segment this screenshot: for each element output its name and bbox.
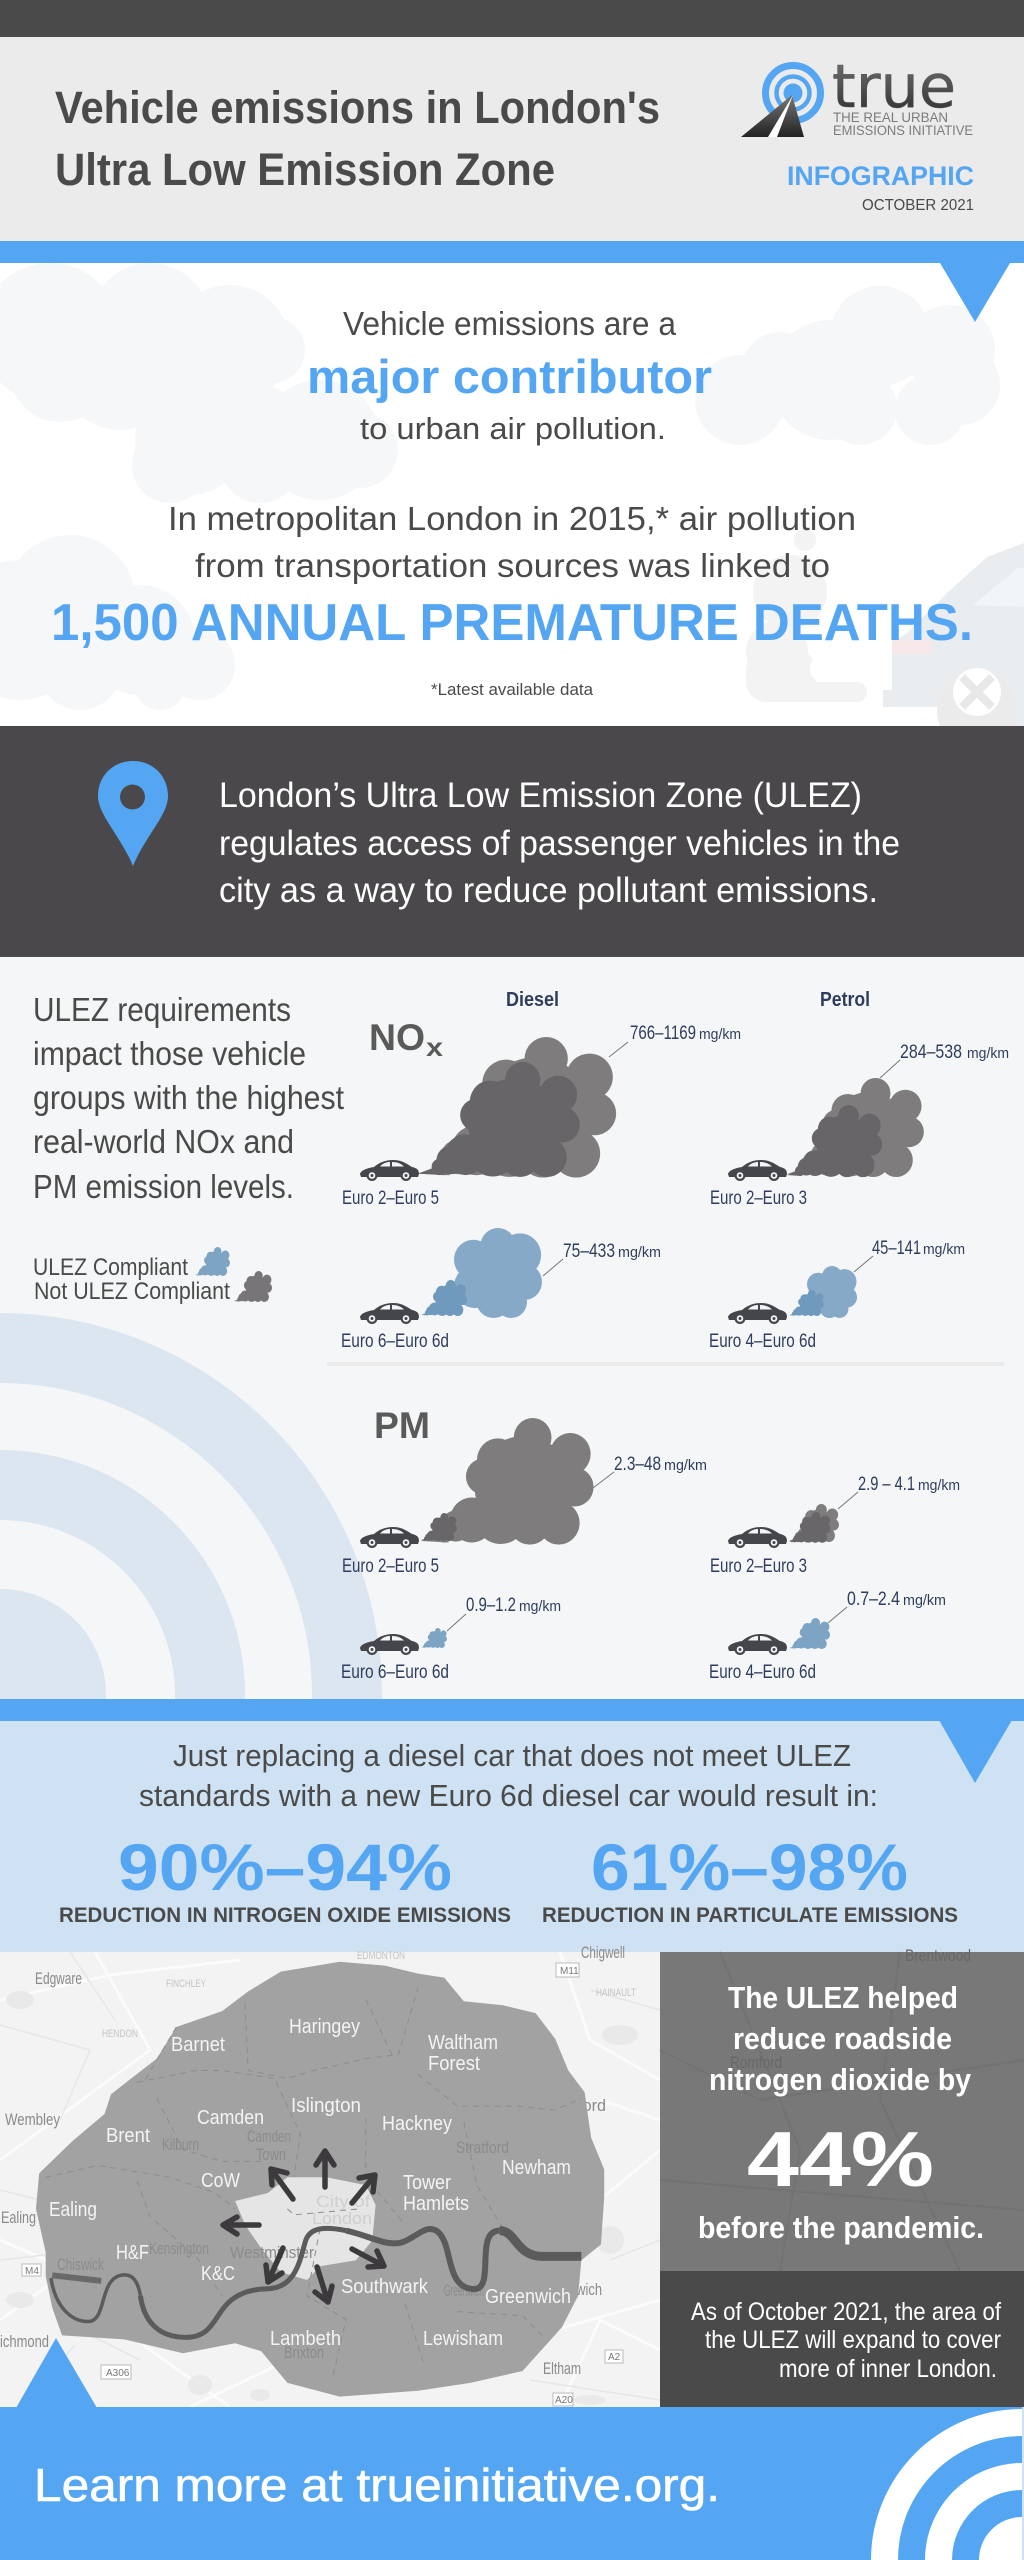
road markers: M4 bbox=[25, 2266, 39, 2277]
borough labels bbox=[49, 2016, 571, 2350]
text: before the pandemic: before the pandemic. bbox=[698, 2210, 984, 2245]
stat: 44%: 44% bbox=[747, 2115, 934, 2203]
borough labels: Forest bbox=[428, 2053, 480, 2075]
outside place names: Ilford bbox=[570, 2096, 606, 2115]
chart: NOx petrol Euro 4-6d bbox=[709, 1238, 965, 1352]
expansion arrows bbox=[223, 2151, 384, 2302]
faint place names: Kilburn bbox=[162, 2135, 199, 2154]
outside place names: Ealing bbox=[1, 2208, 36, 2227]
borough labels: Lewisham bbox=[423, 2328, 503, 2350]
text: replacing a diesel car bbox=[139, 1738, 878, 1813]
panel: emissions by vehicle group bbox=[0, 957, 1024, 1699]
borough labels: Southwark bbox=[341, 2276, 429, 2298]
panel: 44% reduction callout bbox=[660, 1946, 1024, 2271]
faint place names: London bbox=[312, 2209, 372, 2228]
text: requirements bbox=[33, 991, 344, 1205]
column headings: Diesel bbox=[506, 989, 559, 1011]
faint map in panel: Romford bbox=[730, 2053, 782, 2072]
column headings: Petrol bbox=[820, 989, 870, 1011]
panel: map of ULEZ: EDMONTON bbox=[357, 1950, 405, 1962]
infographic label: INFOGRAPHIC bbox=[787, 161, 974, 191]
borough labels: Greenwich bbox=[485, 2286, 571, 2308]
outside place names bbox=[0, 1943, 625, 2378]
panel: expansion note: more of inner London. bbox=[779, 2355, 997, 2383]
chart: PM petrol Euro 4-6d: Euro 4–Euro 6d bbox=[709, 1662, 816, 1683]
borough labels: CoW bbox=[201, 2170, 240, 2192]
text: helped reduce: The ULEZ helped bbox=[728, 1980, 958, 2015]
stat: particulate bbox=[542, 1830, 958, 1927]
text: vehicle emissions: Vehicle emissions are a bbox=[343, 305, 677, 342]
chart: NOx diesel Euro 6: mg/km bbox=[618, 1244, 661, 1261]
title: Vehicle emissions in London's bbox=[55, 82, 660, 133]
legend: ULEZ Compliant bbox=[33, 1254, 188, 1281]
outside place names: ichmond bbox=[0, 2332, 49, 2351]
road markers: M11 bbox=[560, 1966, 579, 1977]
road markers: A2 bbox=[608, 2352, 621, 2363]
borough boundaries bbox=[46, 1987, 581, 2375]
logo: TRUE: true bbox=[832, 52, 956, 122]
faint map in panel bbox=[660, 1946, 1024, 2271]
background clouds bbox=[0, 263, 1000, 710]
panel: map of ULEZ: HAINAULT bbox=[596, 1987, 636, 1999]
panel: reductions bbox=[0, 1699, 1024, 1952]
borough labels: Haringey bbox=[289, 2016, 360, 2038]
text: requirements: PM emission levels. bbox=[33, 1168, 294, 1205]
borough labels: Barnet bbox=[171, 2034, 225, 2056]
legend bbox=[33, 1247, 272, 1305]
text: London deaths: In metropolitan London in 2015,* air pollution bbox=[168, 500, 856, 537]
logo: TRUE bbox=[741, 52, 973, 138]
outside place names: Edgware bbox=[35, 1969, 82, 1988]
faint place names bbox=[57, 2127, 509, 2362]
text: vehicle emissions: major contributor bbox=[307, 350, 712, 403]
chart: PM petrol Euro 2-3: mg/km bbox=[918, 1477, 960, 1494]
text: helped reduce bbox=[709, 1980, 972, 2097]
panel: expansion note bbox=[660, 2271, 1024, 2407]
NOx heading bbox=[369, 1017, 443, 1062]
ULEZ zone area bbox=[36, 1962, 604, 2397]
chart: NOx diesel Euro 6 bbox=[341, 1228, 661, 1352]
outside place names: Wembley bbox=[5, 2110, 60, 2129]
text: ULEZ definition bbox=[219, 776, 900, 910]
faint place names: Camden bbox=[247, 2127, 291, 2146]
borough labels: Hackney bbox=[382, 2113, 452, 2135]
NOx heading: NO bbox=[369, 1017, 425, 1058]
chart: PM petrol Euro 4-6d: mg/km bbox=[903, 1592, 946, 1609]
decorative rings bbox=[0, 1313, 382, 1699]
text: vehicle emissions bbox=[307, 305, 712, 446]
faint place names: Town bbox=[256, 2145, 286, 2164]
chart: NOx diesel Euro 2-5: mg/km bbox=[699, 1026, 741, 1043]
road markers: A306 bbox=[106, 2368, 130, 2379]
text: London deaths: 1,500 ANNUAL PREMATURE DEATHS. bbox=[51, 594, 973, 652]
legend: Not ULEZ Compliant bbox=[34, 1278, 230, 1305]
chart: NOx diesel Euro 6: Euro 6–Euro 6d bbox=[341, 1331, 449, 1352]
chart: NOx diesel Euro 2-5: 766–1169 bbox=[630, 1023, 696, 1044]
chart: NOx diesel Euro 2-5 bbox=[342, 1023, 741, 1209]
borough labels: Ealing bbox=[49, 2199, 97, 2221]
faint place names: Chiswick bbox=[57, 2255, 104, 2274]
faint map in panel: Brentwood bbox=[905, 1946, 971, 1965]
faint place names: Greenwich bbox=[444, 2281, 484, 2300]
text: requirements: impact those vehicle bbox=[33, 1035, 306, 1072]
pointer bbox=[16, 2338, 97, 2408]
chart: NOx petrol Euro 4-6d: Euro 4–Euro 6d bbox=[709, 1331, 816, 1352]
chart: NOx petrol Euro 4-6d: mg/km bbox=[923, 1241, 965, 1258]
decorative rings bbox=[871, 2407, 1024, 2560]
blue stripe with pointer bbox=[0, 241, 1024, 322]
text: London deaths bbox=[51, 500, 973, 699]
background car and exhaust bbox=[746, 529, 1024, 726]
faint place names: City of bbox=[316, 2192, 370, 2211]
text: requirements: ULEZ requirements bbox=[33, 991, 291, 1028]
chart: PM petrol Euro 2-3: Euro 2–Euro 3 bbox=[710, 1556, 807, 1577]
faint place names: Brixton bbox=[284, 2343, 324, 2362]
text: ULEZ definition: London’s Ultra Low Emission Zone (ULEZ) bbox=[219, 776, 862, 815]
text: requirements: real-world NOx and bbox=[33, 1123, 294, 1160]
text: helped reduce: nitrogen dioxide by bbox=[709, 2062, 972, 2097]
outside place names: Eltham bbox=[543, 2359, 581, 2378]
stat: nitrogen oxide: REDUCTION IN NITROGEN OXIDE EMISSIONS bbox=[59, 1903, 511, 1927]
panel: map of ULEZ: FINCHLEY bbox=[166, 1978, 206, 1990]
chart: NOx petrol Euro 4-6d: 45–141 bbox=[872, 1238, 921, 1259]
borough labels: Tower bbox=[403, 2172, 451, 2194]
text: London deaths: from transportation sources was linked to bbox=[195, 547, 830, 584]
outside place names: Woolwich bbox=[547, 2280, 602, 2299]
text: replacing a diesel car: Just replacing a diesel car that does not meet ULEZ bbox=[173, 1738, 851, 1773]
panel: header bbox=[0, 37, 1024, 241]
chart: PM diesel Euro 2-5 bbox=[342, 1418, 707, 1577]
borough labels: Newham bbox=[502, 2157, 571, 2179]
text: ULEZ definition: regulates access of passenger vehicles in the bbox=[219, 824, 900, 863]
chart: PM diesel Euro 6: 0.9–1.2 bbox=[466, 1595, 516, 1616]
text: vehicle emissions: to urban air pollution. bbox=[360, 411, 666, 446]
chart: PM petrol Euro 2-3 bbox=[710, 1474, 960, 1577]
panel: ULEZ definition bbox=[0, 726, 1024, 957]
chart: NOx petrol Euro 2-3 bbox=[710, 1042, 1009, 1209]
chart: NOx petrol Euro 2-3: 284–538 bbox=[900, 1042, 962, 1063]
PM heading: PM bbox=[374, 1405, 430, 1446]
NOx heading: x bbox=[426, 1034, 443, 1062]
stat: particulate: 61%–98% bbox=[591, 1830, 908, 1904]
title bbox=[55, 82, 660, 195]
road markers: A20 bbox=[555, 2395, 573, 2406]
chart: PM petrol Euro 2-3: 2.9 – 4.1 bbox=[858, 1474, 915, 1495]
blue stripe with pointer bbox=[0, 1699, 1024, 1783]
top bar bbox=[0, 0, 1024, 37]
date: OCTOBER 2021 bbox=[862, 197, 974, 214]
borough labels: K&C bbox=[201, 2263, 235, 2285]
stat: nitrogen oxide: 90%–94% bbox=[118, 1830, 452, 1904]
panel: air pollution intro bbox=[0, 263, 1024, 726]
borough labels: H&F bbox=[116, 2242, 149, 2264]
chart: PM petrol Euro 4-6d bbox=[709, 1589, 946, 1683]
chart: PM diesel Euro 6: mg/km bbox=[519, 1598, 561, 1615]
text: ULEZ definition: city as a way to reduce pollutant emissions. bbox=[219, 871, 878, 910]
borough labels: Islington bbox=[291, 2095, 361, 2117]
icon: location pin bbox=[98, 761, 168, 866]
text: replacing a diesel car: standards with a new Euro 6d diesel car would result in: bbox=[139, 1778, 878, 1813]
faint place names: Kensington bbox=[149, 2239, 209, 2258]
text: London deaths: *Latest available data bbox=[431, 680, 594, 699]
borough labels: Waltham bbox=[428, 2032, 498, 2054]
chart: PM diesel Euro 2-5: 2.3–48 bbox=[614, 1454, 661, 1475]
column headings bbox=[506, 989, 870, 1011]
call to action: Learn more at trueinitiative.org. bbox=[34, 2459, 720, 2511]
chart: PM diesel Euro 6: Euro 6–Euro 6d bbox=[341, 1662, 449, 1683]
borough labels: Camden bbox=[197, 2107, 264, 2129]
panel: footer bbox=[0, 2338, 1024, 2560]
logo: TRUE: THE REAL URBAN bbox=[833, 110, 948, 125]
chart: PM petrol Euro 4-6d: 0.7–2.4 bbox=[847, 1589, 900, 1610]
borough labels: Hamlets bbox=[403, 2193, 469, 2215]
chart: PM diesel Euro 2-5: mg/km bbox=[664, 1457, 707, 1474]
borough labels: Lambeth bbox=[270, 2328, 341, 2350]
chart: NOx diesel Euro 2-5: Euro 2–Euro 5 bbox=[342, 1188, 439, 1209]
text: requirements: groups with the highest bbox=[33, 1079, 344, 1116]
chart: NOx petrol Euro 2-3: Euro 2–Euro 3 bbox=[710, 1188, 807, 1209]
text: helped reduce: reduce roadside bbox=[733, 2021, 952, 2056]
outside place names: Chigwell bbox=[581, 1943, 625, 1962]
stat: particulate: REDUCTION IN PARTICULATE EMISSIONS bbox=[542, 1903, 958, 1927]
borough labels: Brent bbox=[106, 2125, 150, 2147]
map background roads bbox=[0, 1952, 660, 2407]
logo: TRUE: EMISSIONS INITIATIVE bbox=[833, 123, 973, 138]
faint place names: Stratford bbox=[456, 2138, 509, 2157]
faint place names: Westminster bbox=[230, 2243, 314, 2262]
stat: nitrogen oxide bbox=[59, 1830, 511, 1927]
chart: NOx petrol Euro 2-3: mg/km bbox=[967, 1045, 1009, 1062]
River Thames bbox=[51, 2228, 581, 2337]
chart: PM diesel Euro 2-5: Euro 2–Euro 5 bbox=[342, 1556, 439, 1577]
panel: map of ULEZ bbox=[0, 1943, 660, 2407]
road markers bbox=[22, 1963, 623, 2406]
chart: PM diesel Euro 6 bbox=[341, 1595, 561, 1683]
title: Ultra Low Emission Zone bbox=[55, 144, 555, 195]
chart: NOx diesel Euro 6: 75–433 bbox=[563, 1241, 615, 1262]
panel: map of ULEZ: HENDON bbox=[102, 2028, 138, 2040]
